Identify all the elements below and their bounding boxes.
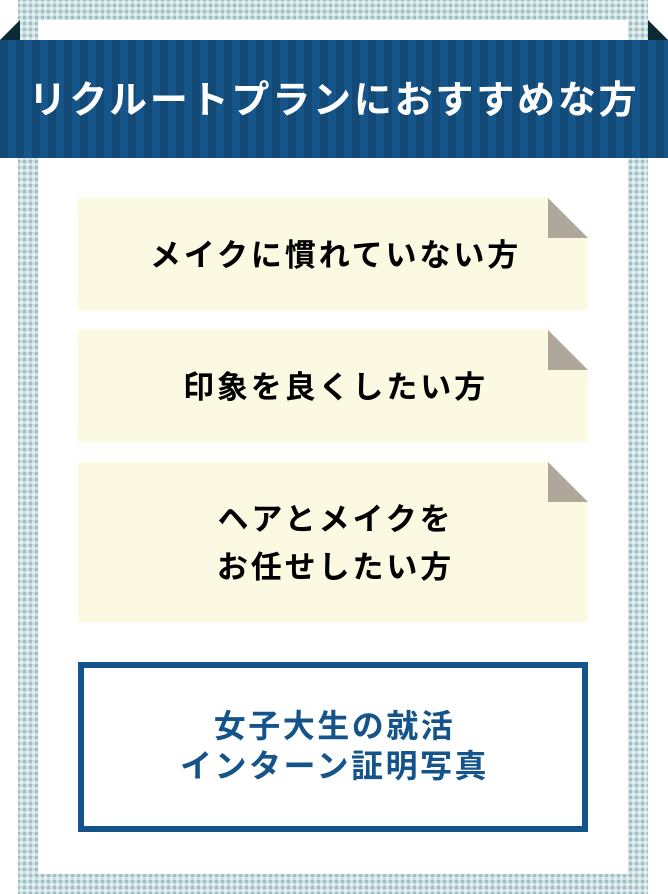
note card 2: 印象を良くしたい方: [183, 370, 488, 404]
outlined plan box: インターン証明写真: [180, 748, 489, 784]
note card 3: ヘアとメイクを: [217, 502, 454, 536]
outlined plan box: [78, 662, 588, 832]
note card 1: メイクに慣れていない方: [150, 238, 521, 272]
title band: [0, 40, 668, 158]
ribbon fold right: [648, 20, 668, 40]
note card 2: [78, 330, 588, 442]
note card 1: [78, 198, 588, 310]
ribbon fold left: [0, 20, 20, 40]
note card 3: お任せしたい方: [217, 550, 454, 584]
title band: リクルートプランにおすすめな方: [29, 80, 639, 122]
outlined plan box: 女子大生の就活: [214, 708, 455, 744]
note card 3: [78, 462, 588, 622]
